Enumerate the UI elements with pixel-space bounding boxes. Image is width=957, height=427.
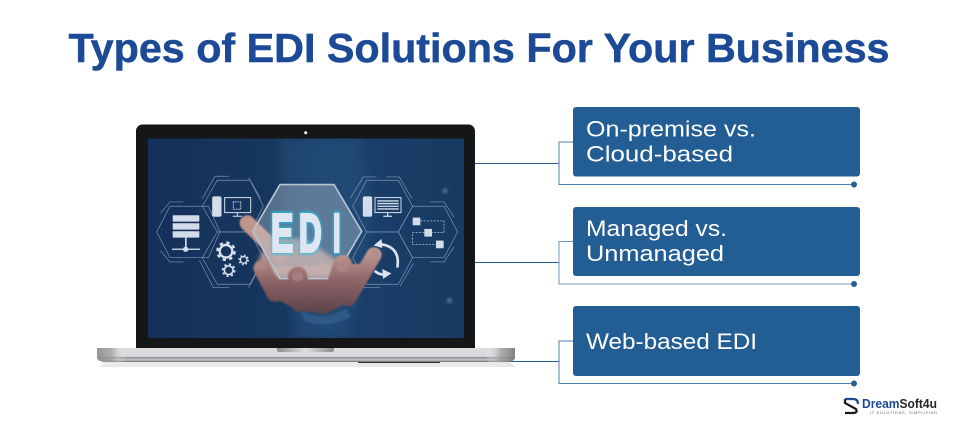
logo tagline: IT SOLUTIONS. SIMPLIFIED — [870, 411, 937, 415]
laptop lid — [136, 124, 475, 348]
connector lines: option 2 — [475, 242, 857, 287]
EDI glow label — [271, 202, 341, 264]
EDI glow label: I — [333, 204, 341, 264]
hand palm — [258, 264, 363, 314]
option box: Managed vs. Unmanaged: Unmanaged — [586, 241, 724, 266]
icon: refresh arrows — [374, 240, 398, 278]
connector lines: option 1 — [475, 142, 857, 188]
webcam — [304, 131, 307, 134]
option box: Web-based EDI — [573, 306, 860, 376]
person silhouette — [278, 139, 373, 338]
laptop screen image — [148, 138, 464, 338]
icon: gears — [217, 243, 248, 276]
sleeve cuff — [300, 309, 351, 324]
EDI glow label: D — [299, 204, 322, 264]
EDI glow label: E — [271, 202, 293, 264]
laptop base shadow — [100, 361, 516, 367]
hand fingers — [262, 255, 374, 302]
laptop notch — [277, 348, 334, 352]
title: Types of EDI Solutions For Your Business — [68, 25, 889, 71]
background bokeh dots — [442, 188, 452, 303]
logo wordmark: DreamSoft4u — [862, 397, 937, 411]
fingertip highlights — [256, 249, 380, 281]
hexagon network lines — [157, 176, 458, 288]
laptop base — [97, 348, 515, 363]
icon: flow diagram — [413, 218, 444, 248]
logo: DreamSoft4u — [845, 397, 937, 415]
option box: Managed vs. Unmanaged — [573, 207, 860, 276]
laptop — [97, 124, 516, 367]
option box: Managed vs. Unmanaged: Managed vs. — [586, 216, 727, 241]
EDI glow label: D — [299, 204, 322, 264]
option box: Web-based EDI: Web-based EDI — [586, 329, 757, 354]
hand back seen through hexagon — [258, 235, 343, 277]
EDI glow label: E — [271, 202, 293, 264]
connector lines: option 3 — [505, 341, 857, 386]
logo icon — [845, 399, 858, 413]
option box: On-premise vs. Cloud-based — [573, 107, 860, 176]
option box: On-premise vs. Cloud-based: On-premise vs. — [586, 116, 756, 142]
central hexagon — [253, 185, 362, 279]
icon: desktop computer list — [363, 197, 401, 216]
icon: server stack — [172, 215, 200, 252]
thumb — [247, 223, 280, 255]
EDI glow label: I — [333, 204, 341, 264]
option box: On-premise vs. Cloud-based: Cloud-based — [586, 142, 733, 166]
icon: computer chip — [213, 197, 251, 216]
